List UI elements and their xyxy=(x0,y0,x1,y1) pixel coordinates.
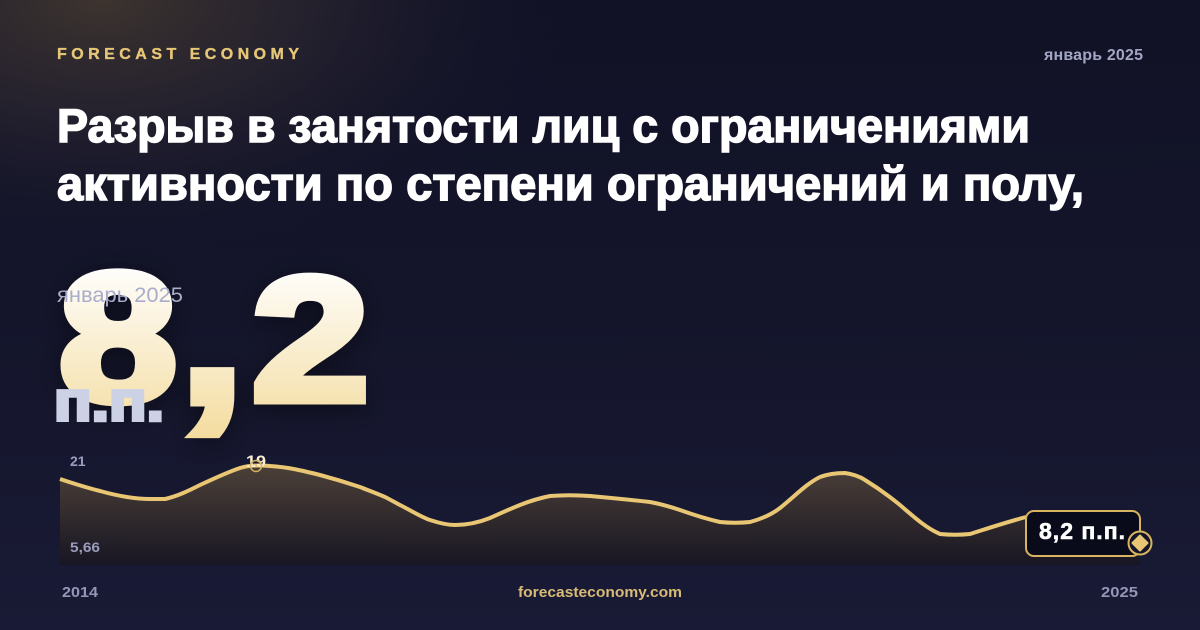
chart area xyxy=(60,465,1140,565)
axis max label: 21 xyxy=(70,453,86,469)
peak label: 19 xyxy=(246,452,266,471)
title xyxy=(57,99,1084,210)
callout xyxy=(1026,511,1140,556)
title: Разрыв в занятости лиц с ограничениями xyxy=(57,99,1030,152)
end marker xyxy=(1128,532,1152,554)
title: активности по степени ограничений и полу, xyxy=(57,157,1084,210)
big number: 2 xyxy=(252,242,369,438)
date top right: январь 2025 xyxy=(1043,47,1143,64)
chart line xyxy=(60,465,1026,535)
unit: п.п. xyxy=(54,370,164,432)
brand label: FORECAST ECONOMY xyxy=(57,46,299,63)
big number: , xyxy=(179,218,245,446)
chart xyxy=(60,452,1140,565)
callout: 8,2 п.п. xyxy=(1039,518,1125,544)
start year: 2014 xyxy=(62,584,99,601)
big number xyxy=(59,218,369,446)
big number: 8 xyxy=(59,235,177,439)
subtitle date: январь 2025 xyxy=(57,284,183,307)
peak marker xyxy=(250,460,262,472)
end year: 2025 xyxy=(1101,584,1138,601)
axis min label: 5,66 xyxy=(70,539,100,555)
website: forecasteconomy.com xyxy=(518,584,682,601)
